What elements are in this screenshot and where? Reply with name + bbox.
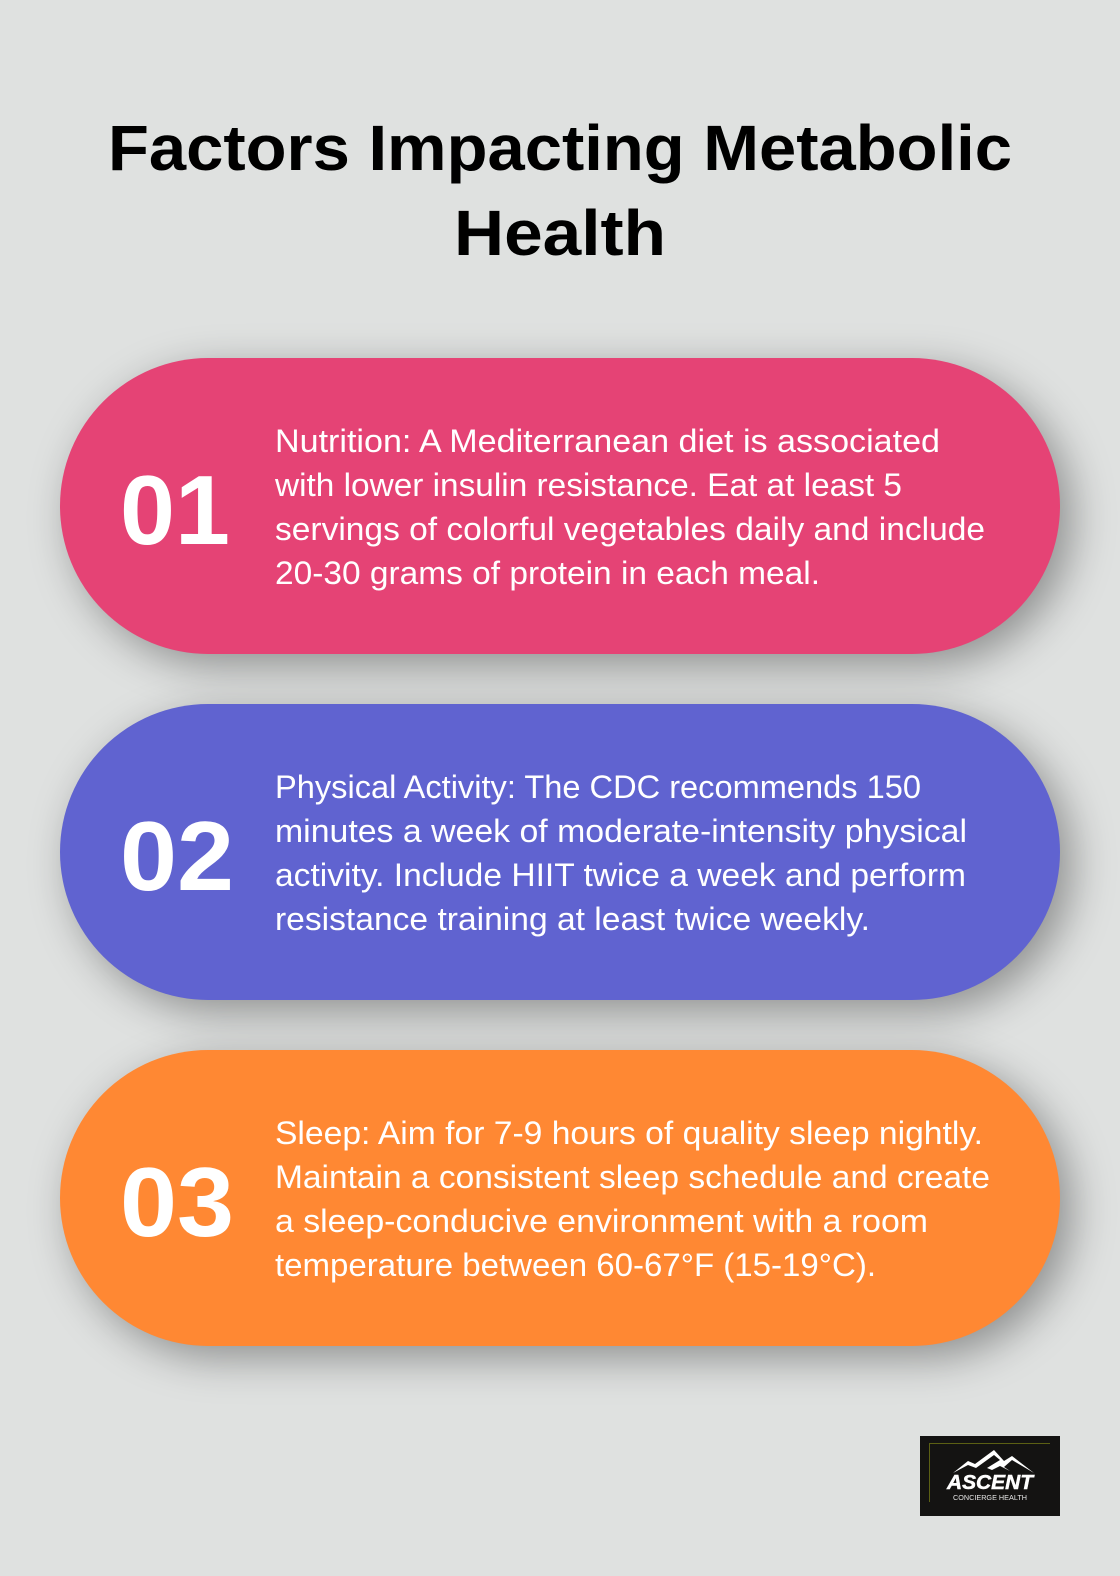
title: Factors Impacting Metabolic xyxy=(108,112,1012,184)
panel: 03 sleep xyxy=(60,1050,1060,1346)
text: sleep: Sleep: Aim for 7-9 hours of quality sleep nightly. xyxy=(275,1115,983,1151)
text: sleep: a sleep-conducive environment with a room xyxy=(275,1203,928,1239)
title: Health xyxy=(454,197,666,269)
text: nutrition: servings of colorful vegetables daily and include xyxy=(275,511,985,547)
text: physical activity: resistance training at least twice weekly. xyxy=(275,901,870,937)
logo wordmark: ASCENT xyxy=(946,1472,1035,1494)
panel: 01 nutrition xyxy=(60,358,1060,654)
text: nutrition: with lower insulin resistance. Eat at least 5 xyxy=(274,467,902,503)
text: physical activity xyxy=(275,769,967,937)
number 03: 03 xyxy=(120,1147,234,1257)
text: sleep xyxy=(275,1115,990,1283)
text: physical activity: Physical Activity: The CDC recommends 150 xyxy=(275,769,921,805)
text: nutrition: Nutrition: A Mediterranean diet is associated xyxy=(275,423,940,459)
panel: 02 physical activity xyxy=(60,704,1060,1000)
text: nutrition xyxy=(274,423,985,591)
text: physical activity: activity. Include HIIT twice a week and perform xyxy=(275,857,966,893)
text: sleep: Maintain a consistent sleep schedule and create xyxy=(275,1159,990,1195)
text: physical activity: minutes a week of moderate-intensity physical xyxy=(275,813,967,849)
icon: mountains xyxy=(953,1450,1034,1473)
text: nutrition: 20-30 grams of protein in each meal. xyxy=(275,555,820,591)
title xyxy=(108,112,1012,269)
number 02: 02 xyxy=(120,801,234,911)
logo tagline: CONCIERGE HEALTH xyxy=(953,1493,1027,1502)
text: sleep: temperature between 60-67°F (15-19°C). xyxy=(275,1247,876,1283)
number 01: 01 xyxy=(120,455,230,565)
logo: Ascent Concierge Health xyxy=(920,1436,1060,1516)
